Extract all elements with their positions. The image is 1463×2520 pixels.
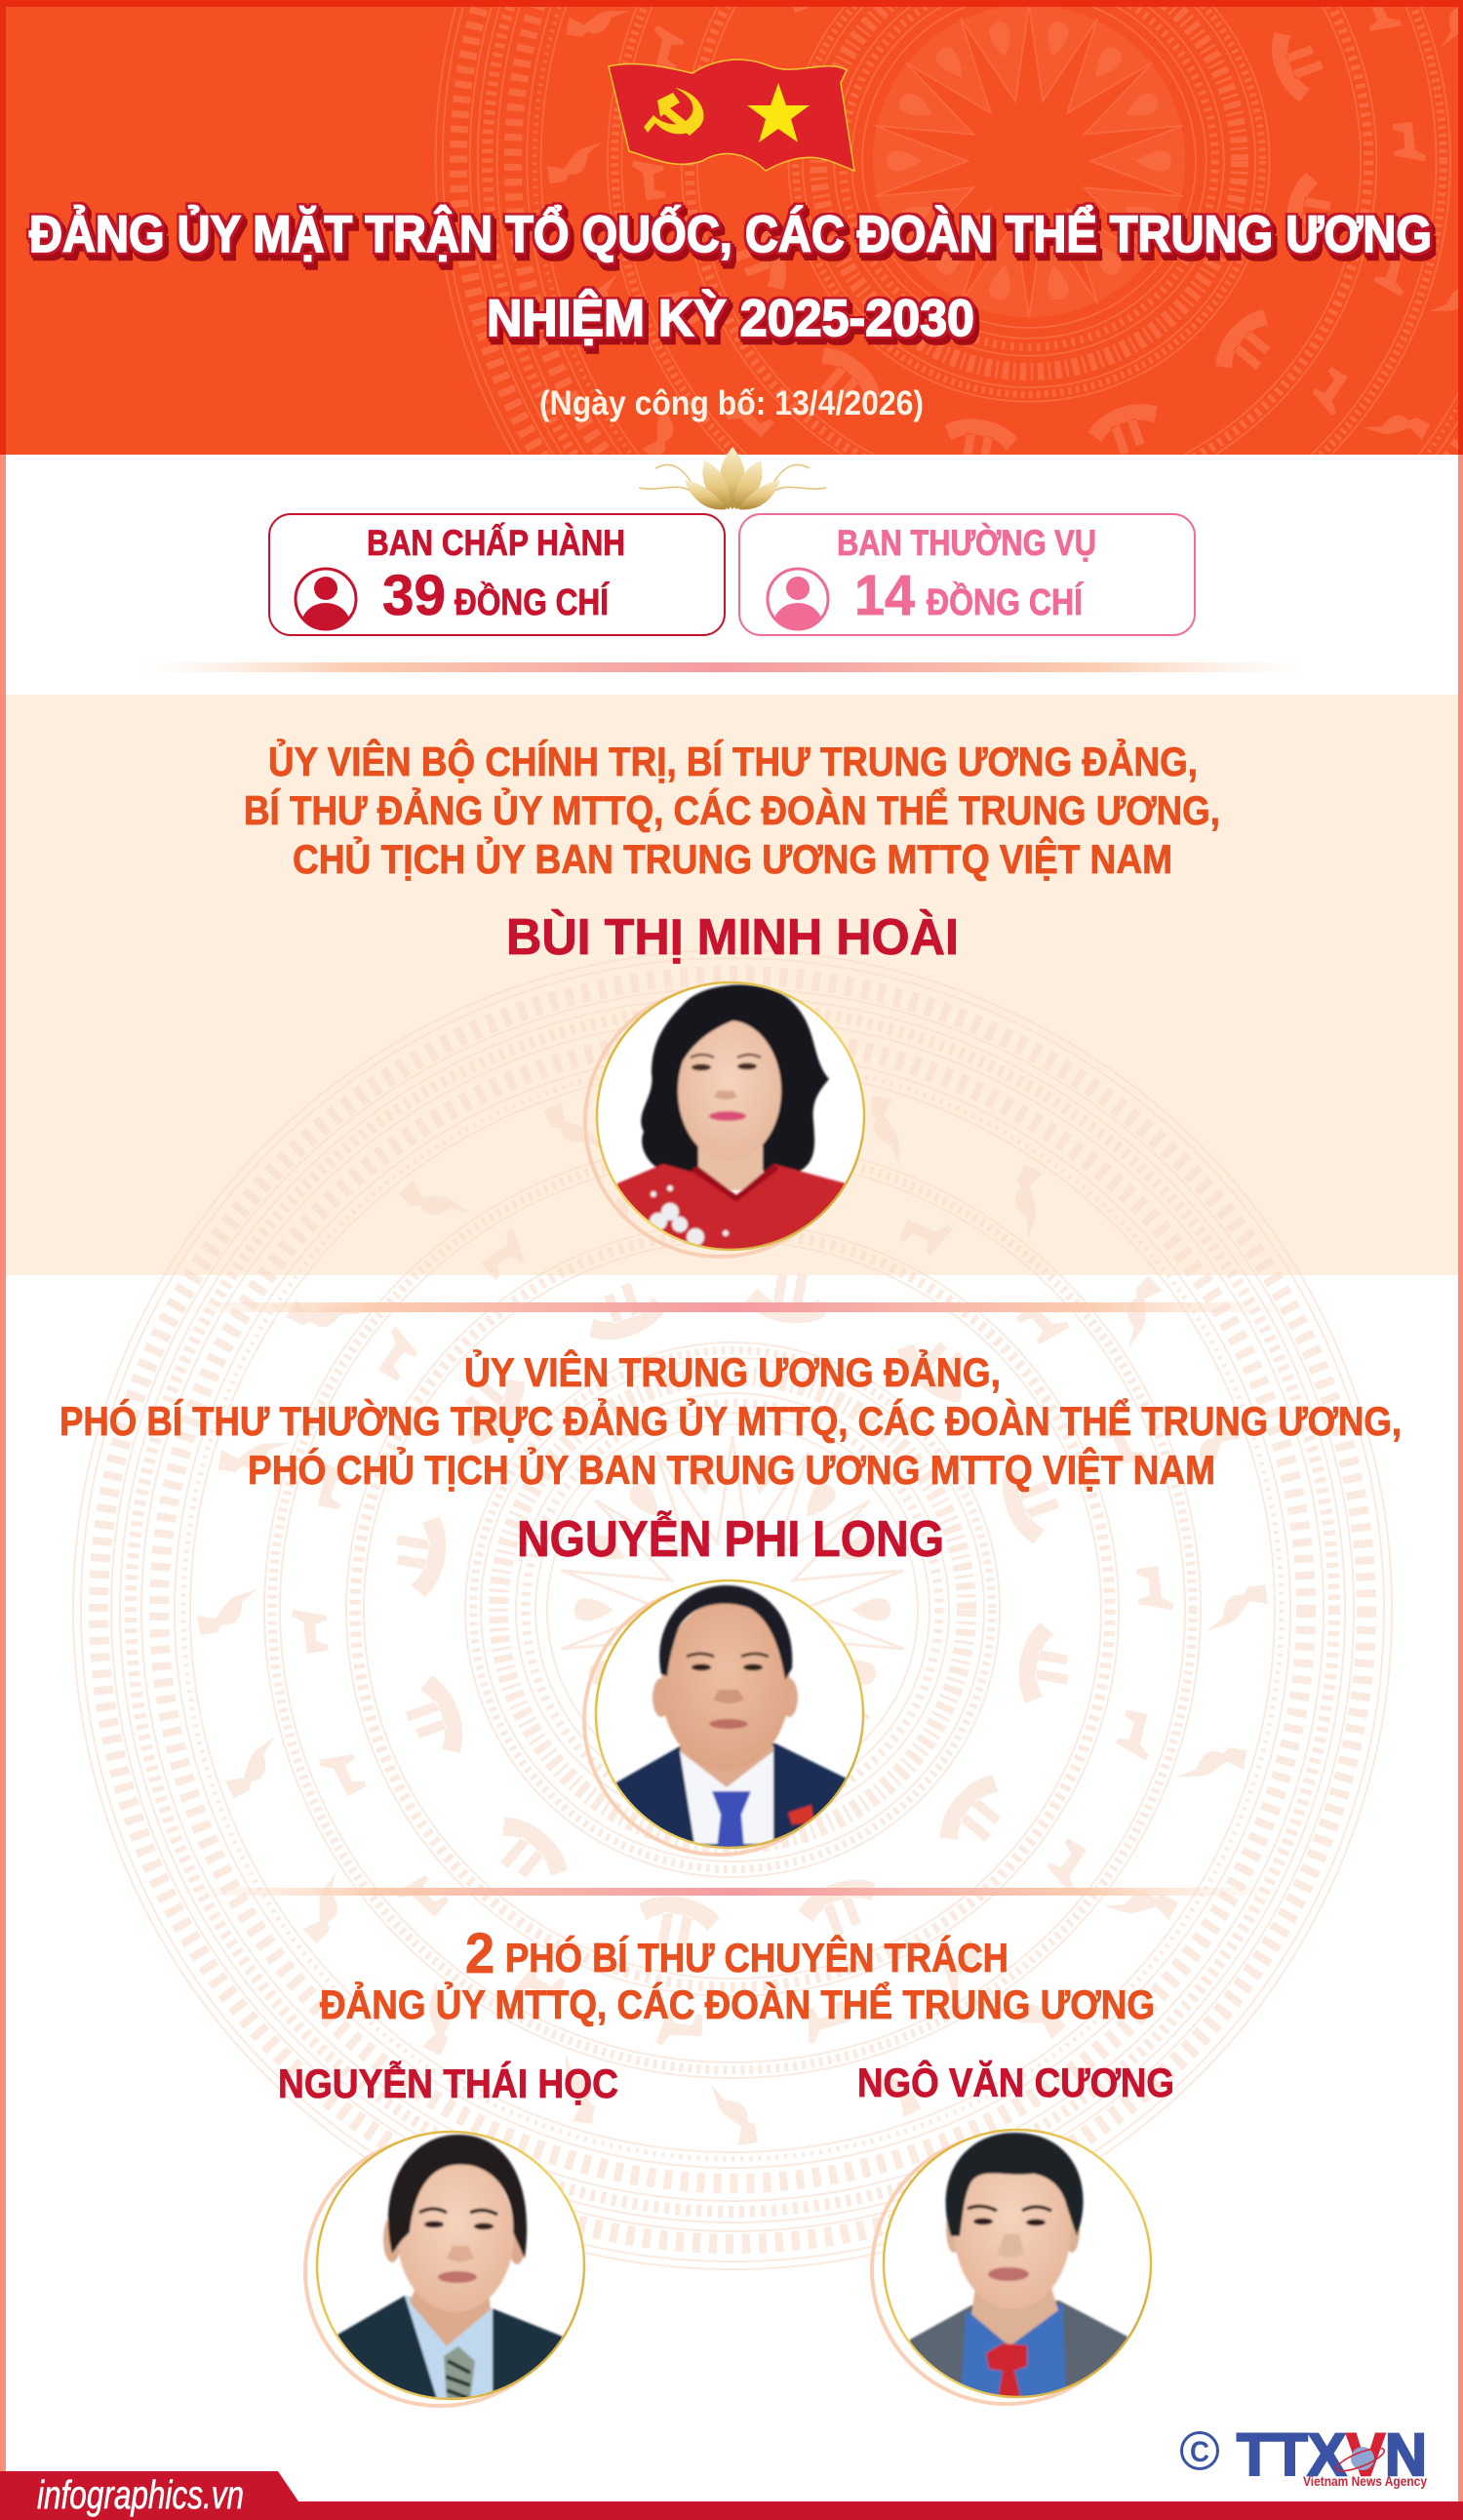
panel: cream background for first leader — [6, 695, 1458, 1275]
header banner — [0, 0, 1463, 455]
icon: person pink — [767, 568, 829, 630]
text: first leader position: CHỦ TỊCH ỦY BAN TRUNG ƯƠNG MTTQ VIỆT NAM — [293, 835, 1172, 882]
text: deputy secretaries heading: PHÓ BÍ THƯ CHUYÊN TRÁCH — [505, 1934, 1008, 1980]
text: first leader position: BÍ THƯ ĐẢNG ỦY MTTQ, CÁC ĐOÀN THỂ TRUNG ƯƠNG, — [244, 786, 1220, 833]
logo: TTXVN Vietnam News Agency: Vietnam News Agency — [1303, 2473, 1427, 2489]
portrait: Nguyễn Thái Học — [305, 2132, 584, 2410]
text: deputy secretaries heading — [320, 1922, 1155, 2027]
panel: standing committee count: ĐỒNG CHÍ — [927, 580, 1084, 623]
text: deputy secretaries heading: ĐẢNG ỦY MTTQ, CÁC ĐOÀN THỂ TRUNG ƯƠNG — [320, 1980, 1155, 2027]
background: bronze drum pattern — [73, 950, 1392, 2269]
text: first leader position — [244, 738, 1220, 882]
name: Nguyễn Thái Học: NGUYỄN THÁI HỌC — [278, 2060, 618, 2106]
panel: standing committee count — [739, 514, 1195, 646]
panel: central committee count: 39 — [382, 564, 446, 627]
panel: standing committee count: 14 — [854, 564, 915, 627]
panel: central committee count: BAN CHẤP HÀNH — [367, 523, 625, 563]
portrait: Nguyễn Phi Long — [584, 1580, 863, 1855]
text: second leader position — [59, 1348, 1402, 1493]
text: second leader position: ỦY VIÊN TRUNG ƯƠNG ĐẢNG, — [464, 1348, 1001, 1395]
name: Ngô Văn Cương: NGÔ VĂN CƯƠNG — [857, 2059, 1174, 2105]
panel: central committee count: ĐỒNG CHÍ — [455, 580, 610, 623]
panel: central committee count — [269, 514, 725, 646]
logo: TTXVN Vietnam News Agency: C — [1190, 2436, 1209, 2468]
title: NHIỆM KỲ 2025-2030 — [487, 288, 974, 347]
title — [29, 204, 1432, 347]
name: Nguyễn Phi Long: NGUYỄN PHI LONG — [517, 1510, 944, 1568]
text: deputy secretaries heading: 2 — [465, 1922, 494, 1985]
icon: person red — [295, 568, 357, 630]
logo: TTXVN Vietnam News Agency: TTXVN — [1237, 2421, 1427, 2488]
portrait: Bùi Thị Minh Hoài — [585, 982, 868, 1268]
publication date: (Ngày công bố: 13/4/2026) — [539, 384, 924, 422]
text: first leader position: ỦY VIÊN BỘ CHÍNH TRỊ, BÍ THƯ TRUNG ƯƠNG ĐẢNG, — [268, 738, 1198, 784]
panel: standing committee count: BAN THƯỜNG VỤ — [837, 522, 1096, 563]
portrait: Ngô Văn Cương — [872, 2130, 1151, 2410]
icon: party flag — [609, 60, 854, 171]
footer bar — [0, 2471, 1463, 2520]
icon: gold lotus — [639, 447, 826, 509]
site name: infographics.vn — [37, 2472, 244, 2517]
text: second leader position: PHÓ CHỦ TỊCH ỦY BAN TRUNG ƯƠNG MTTQ VIỆT NAM — [248, 1446, 1215, 1493]
name: Bùi Thị Minh Hoài: BÙI THỊ MINH HOÀI — [506, 909, 959, 966]
